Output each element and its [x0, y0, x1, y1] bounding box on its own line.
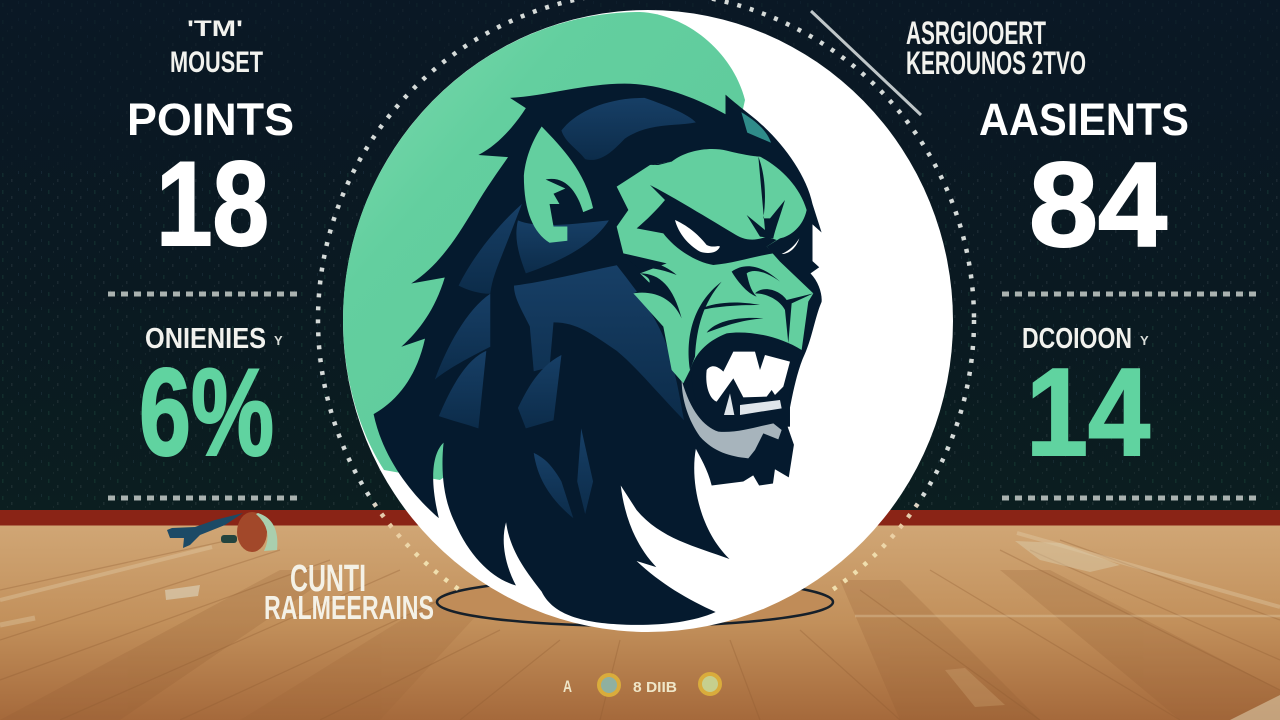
badge: mint half — [343, 12, 745, 480]
right lower divider — [1002, 496, 1256, 500]
stat: left header: MOUSET — [170, 46, 263, 79]
badge: white circle — [343, 10, 953, 632]
mascot — [374, 84, 822, 625]
left divider — [108, 292, 298, 296]
slash accent — [811, 11, 921, 115]
dark arena background — [0, 0, 1280, 527]
stat: left header: 'TM' — [187, 16, 243, 41]
stat: right percentage: Y — [1140, 333, 1149, 348]
stat: left percentage: Y — [274, 333, 283, 348]
stat: points: 18 — [156, 137, 269, 271]
bottom logos: 8 DIIB — [633, 679, 677, 696]
floor caption — [264, 558, 434, 626]
stat: points: POINTS — [127, 94, 294, 145]
far eye — [782, 238, 799, 254]
eye — [675, 220, 720, 253]
stat: points — [127, 94, 294, 271]
left lower divider — [108, 496, 298, 500]
hardwood floor — [0, 526, 1280, 720]
stat: left percentage: 6% — [139, 344, 274, 482]
mouth — [682, 335, 802, 458]
bottom logos — [563, 674, 720, 696]
stat: right percentage: 14 — [1026, 344, 1150, 482]
stat: right header: ASRGIOOERT — [906, 15, 1046, 51]
red baseline band — [0, 510, 1280, 526]
stat: left percentage: ONIENIES — [145, 323, 266, 355]
dotted ring around badge — [318, 0, 974, 648]
mane silhouette and highlights — [374, 84, 822, 625]
stat: assists: 84 — [1029, 138, 1167, 272]
stat: right header: KEROUNOS 2TVO — [906, 45, 1086, 81]
stat: assists: AASIENTS — [979, 94, 1189, 145]
upper teeth — [706, 352, 790, 402]
floor caption: RALMEERAINS — [264, 589, 434, 626]
court centre circle — [437, 578, 833, 626]
bottom logos: A — [563, 677, 572, 696]
right divider — [1002, 292, 1256, 296]
grey jaw — [682, 380, 782, 458]
stat: right percentage: DCOIOON — [1022, 323, 1132, 355]
stat: right header — [906, 15, 1086, 81]
floor clutter: ball and shoe — [167, 512, 277, 552]
stat: left header — [170, 16, 263, 79]
lower teeth — [724, 393, 782, 415]
stat: assists — [979, 94, 1189, 272]
face — [617, 149, 813, 383]
floor caption: CUNTI — [290, 558, 366, 600]
